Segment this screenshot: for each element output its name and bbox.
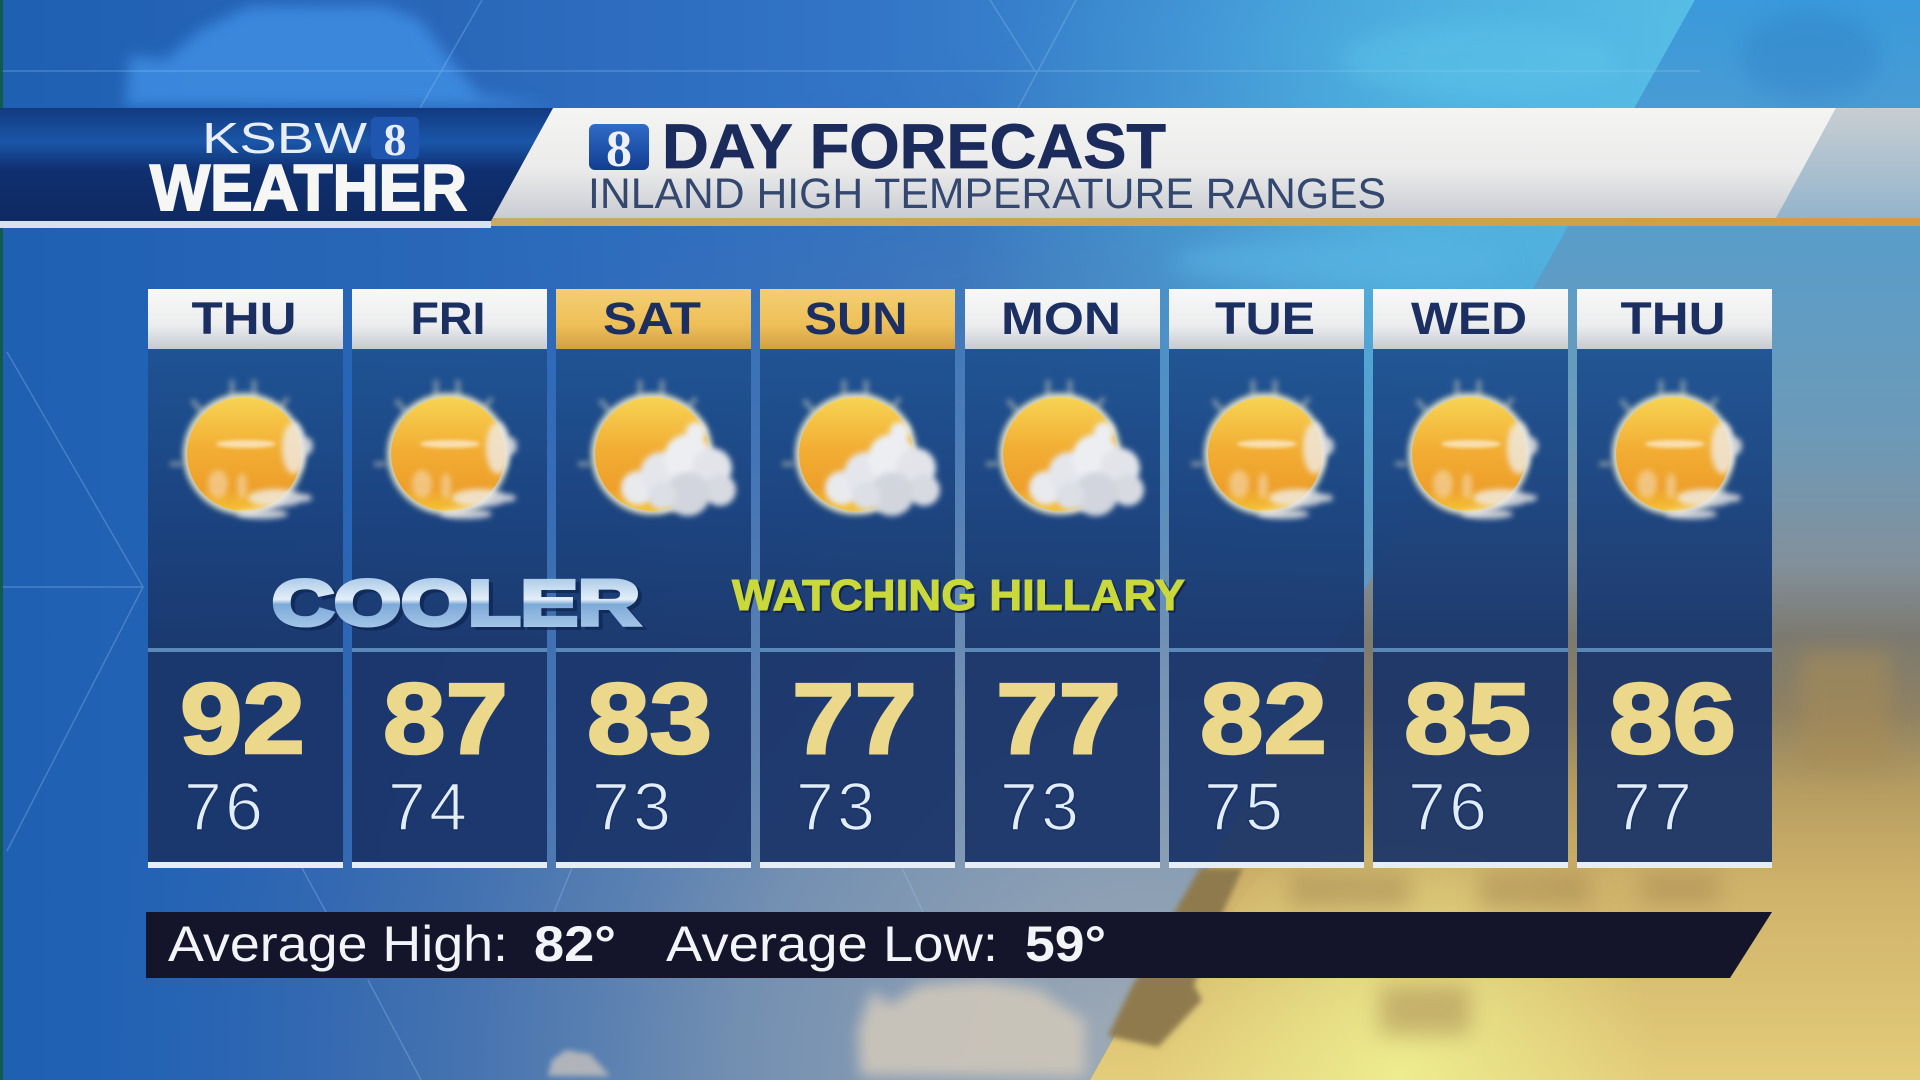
forecast column: Friday: 87 — [383, 663, 508, 775]
forecast column: Friday — [352, 289, 547, 868]
forecast column: Monday: 73 — [1000, 769, 1079, 845]
cloud: white bottom centre — [858, 980, 1085, 1076]
header band: KSBW weather logo panel: KSBW — [202, 114, 368, 163]
average temperature bar: Average High: — [168, 916, 508, 972]
forecast column: Saturday: 73 — [592, 769, 671, 845]
forecast column: Monday: 77 — [996, 663, 1121, 775]
forecast column: Wednesday: WED — [1411, 293, 1527, 344]
title: DAY FORECAST — [662, 112, 1166, 182]
forecast column: Monday — [965, 289, 1160, 868]
average temperature bar: 82° — [534, 916, 616, 972]
forecast column: Tuesday: 75 — [1204, 769, 1283, 845]
forecast column: Sunday: 73 — [796, 769, 875, 845]
callout: watching Hillary: WATCHING HILLARY — [734, 573, 1187, 622]
icon: channel 8 logo — [589, 121, 649, 178]
header band: KSBW weather logo panel: WEATHER — [150, 151, 467, 224]
forecast column: Thursday next week: THU — [1620, 293, 1726, 344]
callout: cooler: COOLER — [272, 567, 640, 639]
forecast column: Thursday: 76 — [184, 769, 263, 845]
forecast column: Saturday — [556, 289, 751, 868]
forecast column: Thursday — [148, 289, 343, 868]
average temperature bar — [146, 912, 1772, 978]
forecast column: Thursday next week — [1577, 289, 1772, 868]
logo: KSBW channel 8 — [371, 114, 419, 165]
forecast column: Sunday: 77 — [792, 663, 917, 775]
cloud: upper left — [125, 6, 553, 106]
forecast column: Saturday: SAT — [603, 293, 701, 344]
cloud: brown shadow — [1108, 868, 1243, 1047]
forecast column: Wednesday: 85 — [1404, 663, 1531, 775]
cloud: gold streaks — [1290, 650, 1890, 1035]
cloud: upper right shadow — [1740, 10, 1880, 100]
cloud: sky patches behind header — [1340, 24, 1620, 96]
subtitle: INLAND HIGH TEMPERATURE RANGES — [588, 170, 1386, 218]
forecast column: Thursday next week: 86 — [1609, 663, 1736, 775]
header band: light title strip — [491, 108, 1920, 226]
forecast column: Monday: MON — [1001, 293, 1121, 344]
callout: watching Hillary: WATCHING HILLARY — [732, 571, 1185, 620]
logo: KSBW channel 8: 8 — [384, 114, 406, 165]
forecast column: Friday: 74 — [388, 769, 467, 845]
forecast column: Wednesday — [1373, 289, 1568, 868]
average temperature bar: Average Low: — [666, 916, 998, 972]
forecast column: Thursday: THU — [192, 293, 296, 344]
header band: KSBW weather logo panel — [0, 108, 553, 228]
forecast column: Wednesday: 76 — [1408, 769, 1487, 845]
forecast column: Sunday — [760, 289, 955, 868]
forecast column: Tuesday: 82 — [1200, 663, 1327, 775]
average temperature bar: 59° — [1025, 916, 1106, 972]
forecast column: Friday: FRI — [410, 293, 486, 344]
cloud: small bottom — [548, 1050, 610, 1076]
forecast column: Saturday: 83 — [587, 663, 712, 775]
callout: cooler: COOLER — [276, 570, 644, 642]
forecast column: Thursday next week: 77 — [1613, 769, 1692, 845]
forecast column: Sunday: SUN — [804, 293, 908, 344]
forecast column: Thursday: 92 — [180, 663, 305, 775]
forecast column: Tuesday: TUE — [1215, 293, 1315, 344]
forecast column: Tuesday — [1169, 289, 1364, 868]
icon: channel 8 logo: 8 — [606, 121, 632, 178]
